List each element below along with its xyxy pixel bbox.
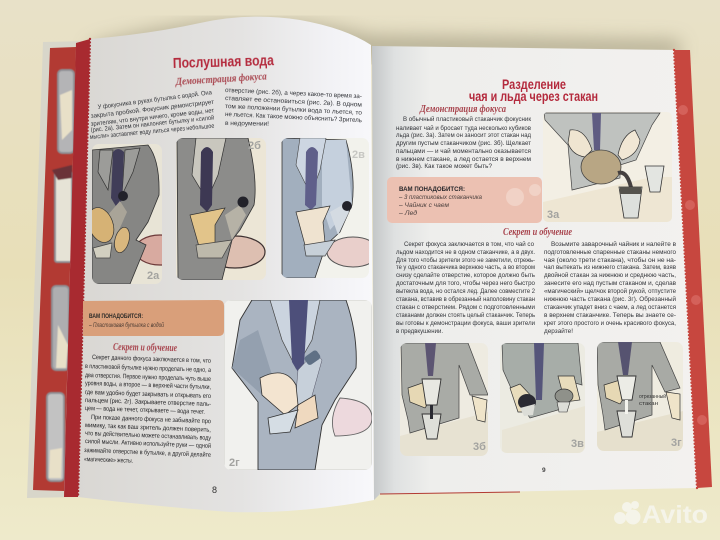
label 3в: 3в bbox=[571, 438, 584, 450]
text block: secret, right page, left column: в предвкушении. bbox=[396, 328, 443, 335]
heading: trick demonstration, right page: Демонстрация фокуса bbox=[419, 103, 506, 115]
label 2г: 2г bbox=[229, 457, 240, 469]
previous page thumbnails bbox=[47, 70, 74, 481]
text block: demonstration, right page: другим пустым стаканчиком (рис. 3б). Щелкает bbox=[396, 139, 531, 147]
text block: demonstration, right page: льда (рис. 3а). Затем он заносит этот стакан над bbox=[396, 132, 531, 139]
text block: secret, left page: зажимайте отверстие в бутылке, а другой делайте bbox=[84, 446, 212, 459]
illustration panel 2б bbox=[176, 138, 266, 280]
text block: secret, left page: При показе данного фокуса не забывайте про bbox=[91, 413, 212, 425]
text block: secret, left page: цем — вода не течет, открываете — вода течет. bbox=[85, 405, 205, 416]
text block: secret, right page, left column: льдом находится не в одном стаканчике, а в двух. bbox=[396, 249, 535, 256]
right page bbox=[372, 46, 697, 500]
text block: demonstration, right page: (рис. 3в). Как такое может быть? bbox=[396, 162, 492, 170]
text block: secret, left page: два отверстия. Первое нужно проделать чуть выше bbox=[85, 372, 211, 383]
text block: demonstration, right page: пальцами — и чай моментально оказывается bbox=[396, 147, 532, 155]
text block: secret, right page, right column: крет этого простого и очень красивого фокуса, bbox=[544, 320, 676, 327]
label 2б: 2б bbox=[248, 140, 261, 152]
text block: demonstration, left column: У фокусника в руках бутылка с водой. Она bbox=[97, 88, 213, 111]
page number 9: 9 bbox=[542, 467, 546, 474]
illustration panel 3г bbox=[597, 342, 683, 451]
text block: demonstration, right column: не льется. Как такое можно объяснить? Зритель bbox=[225, 110, 363, 124]
right page title bbox=[469, 76, 598, 104]
text block: secret, left page: в пластиковой бутылке нужно проделать не одно, а bbox=[85, 362, 211, 374]
caption: cut cup: отрезанный bbox=[639, 393, 666, 400]
label 3а: 3а bbox=[547, 209, 560, 221]
label 3б: 3б bbox=[473, 441, 486, 453]
back cover edge bbox=[27, 41, 90, 498]
text block: secret, left page: пальцем (рис. 2г). Закрываете отверстие паль- bbox=[85, 397, 211, 408]
callout: you will need, right page bbox=[387, 177, 542, 223]
text block: demonstration, right page: В обычный пластиковый стаканчик фокусник bbox=[403, 115, 531, 123]
callout: you will need, left page: ВАМ ПОНАДОБИТСЯ: bbox=[89, 313, 143, 320]
illustration panel 2а bbox=[92, 144, 162, 284]
text block: demonstration, right column: отверстие (рис. 2б), а через какое-то время за- bbox=[225, 86, 362, 100]
illustration panel 3б bbox=[400, 343, 488, 456]
heading: secret and training, left page: Секрет и обучение bbox=[113, 341, 177, 354]
illustration panel 3в bbox=[500, 343, 585, 453]
text block: secret, right page, left column: стакана, вставив в обрезанный наполовину стакан bbox=[396, 295, 535, 303]
text block: secret, right page, right column: в верхнем стаканчике. Теперь вы знаете се- bbox=[544, 312, 676, 319]
watermark logo bbox=[614, 501, 708, 529]
illustration panel 3г: стакан bbox=[639, 401, 658, 407]
text block: secret, right page, right column: дерзайте! bbox=[544, 327, 573, 335]
text block: secret, right page, left column: вы готовы к демонстрации фокуса, ваши зрители bbox=[396, 320, 535, 327]
heading: trick demonstration, left page: Демонстрация фокуса bbox=[175, 70, 267, 88]
text block: demonstration, right column: в недоумении! bbox=[225, 120, 269, 128]
page number 8: 8 bbox=[212, 485, 217, 495]
label 2в: 2в bbox=[352, 149, 365, 161]
label 2а: 2а bbox=[147, 270, 160, 282]
text block: secret, left page: что вы действительно можете останавливать воду bbox=[85, 429, 212, 442]
text block: secret, right page, right column: чал вытекать из нижнего стакана. Затем, взяв bbox=[544, 264, 677, 271]
text block: secret, right page, right column: стаканчик упадет вниз с чаем, а лед останется bbox=[544, 304, 677, 311]
right red ornament strip bbox=[674, 50, 712, 488]
text block: demonstration, right page: в нижнем стакане, а лед остается в верхнем bbox=[396, 156, 531, 163]
text block: demonstration, left column: зрителям, что внутри ничего, кроме воды, нет bbox=[90, 107, 215, 128]
text block: demonstration, right column: том же положении бутылки вода то льется, то bbox=[225, 102, 363, 117]
text block: secret, right page, left column: Секрет фокуса заключается в том, что чай со bbox=[404, 240, 534, 248]
text block: demonstration, right column: ставляет ее остановиться (рис. 2в). В одном bbox=[225, 95, 362, 109]
callout: you will need, right page: – Чайник с чаем bbox=[398, 202, 450, 209]
text block: secret, right page, right column: Возьмите заварочный чайник и налейте в bbox=[551, 240, 677, 248]
callout: you will need, left page: – Пластиковая бутылка с водой bbox=[88, 322, 164, 329]
callout: you will need, right page: ВАМ ПОНАДОБИТСЯ: bbox=[399, 186, 465, 193]
book shadow bbox=[90, 20, 680, 60]
text block: secret, right page, right column: подготовленные спаренные стаканы немного bbox=[544, 249, 676, 256]
right page title: Разделение bbox=[502, 76, 566, 92]
left red binding strip bbox=[64, 39, 90, 497]
text block: secret, left page bbox=[84, 354, 212, 465]
right page title: чая и льда через стакан bbox=[469, 88, 598, 104]
text block: secret, left page: мимику, так как ваш зритель должен поверить, bbox=[85, 422, 211, 434]
bottom red edge of right page bbox=[380, 492, 520, 494]
text block: secret, right page, left column: достаточным для того, чтобы через него быстро bbox=[396, 279, 535, 287]
text block: secret, right page, right column: двойной стакан за нижнюю и среднюю часть, bbox=[544, 271, 676, 279]
text block: demonstration, left column: мысли» заставляет воду литься через небольшое bbox=[89, 122, 215, 141]
text block: secret, right page, left column bbox=[396, 240, 536, 335]
label 3г: 3г bbox=[671, 437, 682, 449]
back cover red strip bbox=[33, 47, 76, 491]
callout: you will need, left page bbox=[83, 300, 224, 336]
text block: secret, right page, left column: стаканами должен стоять целый стаканчик. Теперь bbox=[396, 311, 536, 319]
text block: secret, right page, left column: те у одного стаканчика верхнюю часть, а во втором bbox=[396, 264, 535, 271]
text block: secret, right page, right column: «магический» щелчок второй рукой, отпустите bbox=[544, 287, 676, 295]
text block: demonstration, right page bbox=[396, 115, 532, 170]
text block: secret, left page: «магические» жесты. bbox=[84, 456, 133, 465]
text block: demonstration, right column bbox=[225, 86, 363, 128]
illustration panel 3а bbox=[543, 112, 672, 222]
illustration panel 2г bbox=[224, 300, 372, 470]
text block: secret, right page, left column: Для того чтобы зрители этого не заметили, отрежь- bbox=[396, 256, 535, 264]
text block: secret, right page, right column: нижнюю часть стакана (рис. 3г). Обрезанный bbox=[544, 295, 676, 303]
watermark logo: Avito bbox=[642, 501, 708, 529]
callout: you will need, right page: – Лед bbox=[398, 210, 418, 217]
text block: secret, right page, left column: снизу сделайте отверстие, которое должно быть bbox=[396, 271, 536, 279]
text block: secret, left page: Секрет данного фокуса заключается в том, что bbox=[92, 354, 211, 365]
text block: demonstration, left column: закрыта пробкой. Фокусник демонстрирует bbox=[90, 98, 214, 120]
text block: secret, left page: где вам удобно будет закрывать и открывать его bbox=[85, 388, 212, 400]
text block: secret, left page: уровня воды, а второе — в верхней части бутылки, bbox=[85, 379, 211, 391]
text block: secret, left page: силой мысли. Активно используйте руки — одной bbox=[85, 437, 211, 450]
callout: you will need, right page: – 3 пластиковых стаканчика bbox=[398, 194, 483, 201]
left page title: Послушная вода bbox=[173, 52, 275, 72]
text block: secret, right page, left column: вытекла вода, но остался лед. Далее совместите 2 bbox=[396, 288, 535, 295]
text block: secret, right page, left column: стакан с отверстием. Рядом с подготовленными bbox=[396, 304, 535, 311]
text block: secret, right page, right column: занесите его над пустым стаканом и, сделав bbox=[544, 280, 677, 287]
text block: secret, right page, right column: чая (около трети стакана), чтобы он не на- bbox=[544, 256, 676, 264]
text block: demonstration, left column: (рис. 2а). Затем он наклоняет бутылку и «силой bbox=[90, 113, 215, 134]
text block: demonstration, left column bbox=[89, 88, 215, 141]
text block: secret, right page, right column bbox=[544, 240, 677, 335]
heading: secret and training, right page: Секрет и обучение bbox=[503, 226, 572, 238]
text block: demonstration, right page: наливает чай и бросает туда несколько кубиков bbox=[396, 124, 532, 132]
illustration panel 2в bbox=[281, 138, 369, 278]
left page bbox=[78, 17, 374, 512]
